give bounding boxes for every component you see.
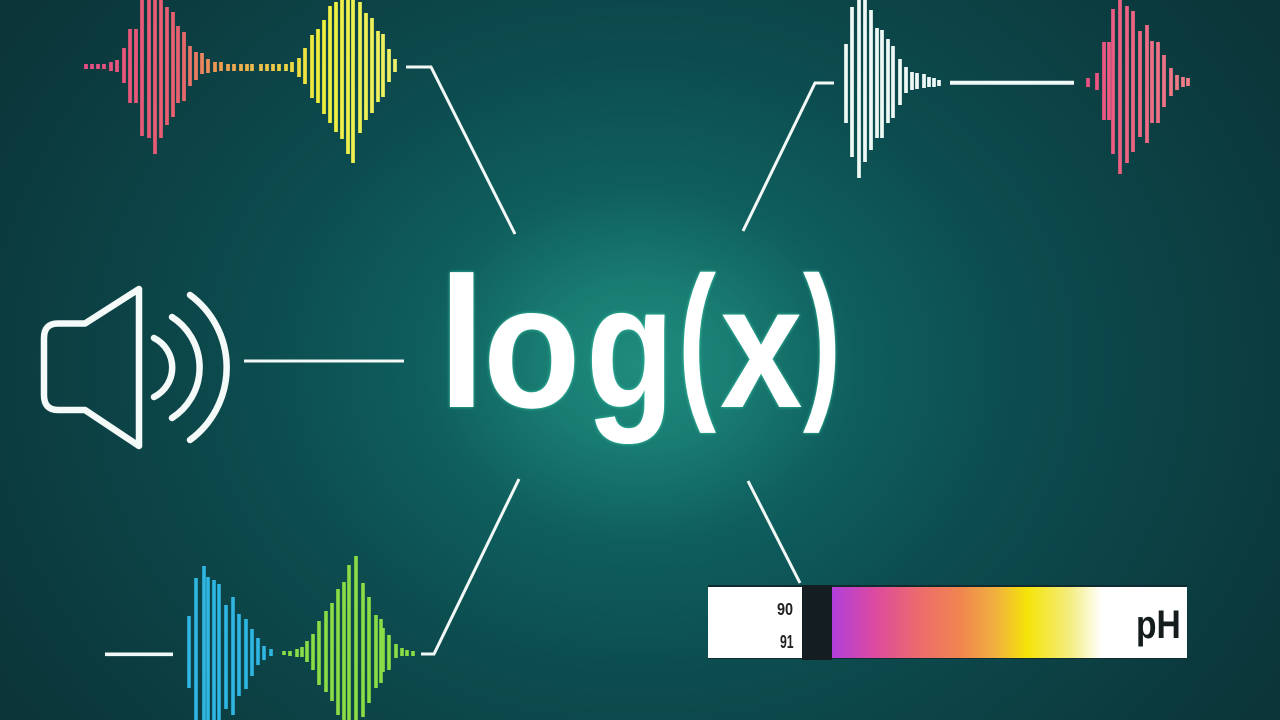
pH colour gradient — [832, 587, 1187, 658]
connector: speaker to log(x) — [244, 360, 404, 362]
title: log(x) formula: g — [586, 249, 674, 444]
waveform: green, bottom left — [284, 556, 413, 720]
title: log(x) formula: x — [720, 250, 802, 445]
line before blue waveform — [105, 652, 173, 656]
pH scale — [708, 585, 1187, 660]
title: log(x) formula: ) — [803, 241, 841, 435]
pH bar outline shadow — [708, 585, 1187, 659]
waveform: white, top right — [846, 0, 939, 178]
connector: bottom-left to log(x) — [421, 479, 519, 654]
connector: top-left waveform to log(x) — [406, 67, 515, 234]
title: log(x) formula: l — [438, 238, 486, 447]
connector: top-right to log(x) — [743, 83, 834, 231]
line between top-right waveforms — [950, 81, 1074, 85]
icon: speaker — [44, 289, 227, 446]
white label box — [708, 587, 802, 658]
black divider — [802, 585, 832, 660]
title: log(x) formula: ( — [678, 241, 716, 435]
title: log(x) formula: o — [483, 249, 580, 445]
waveform: blue, bottom left — [189, 566, 271, 720]
title: log(x) formula — [438, 238, 841, 447]
scale label bottom: 91 — [780, 633, 794, 653]
connector: pH bar to log(x) — [748, 481, 800, 583]
waveform: pink, top right — [1088, 0, 1188, 174]
pH label: pH — [1136, 602, 1181, 647]
waveform: red to yellow, top left — [86, 0, 395, 163]
scale label top: 90 — [777, 600, 793, 619]
